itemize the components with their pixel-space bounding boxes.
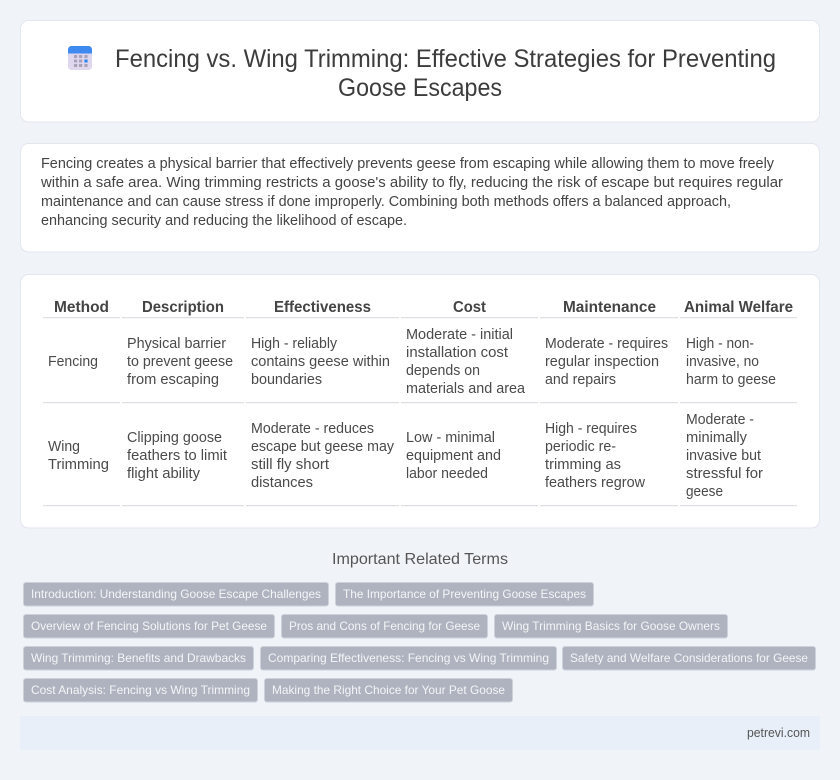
table row: fencing: Moderate - initial bbox=[406, 327, 513, 343]
table row: fencing: regular inspection bbox=[545, 354, 659, 370]
table row: wing trimming: equipment and bbox=[406, 448, 501, 464]
table header row bbox=[54, 299, 793, 316]
table row: wing trimming: Low - minimal bbox=[406, 430, 495, 446]
text block: summary: maintenance and can cause stress if done improperly. Combining both methods offers a balanced approach, bbox=[41, 194, 731, 210]
header panel bbox=[20, 20, 820, 122]
table row: fencing: materials and area bbox=[406, 381, 525, 397]
text block: summary bbox=[40, 156, 783, 229]
tag list: related terms: Safety and Welfare Considerations for Geese bbox=[570, 651, 808, 665]
tag list: related terms: Overview of Fencing Solutions for Pet Geese bbox=[31, 619, 267, 633]
tag list: related terms: Wing Trimming Basics for Goose Owners bbox=[502, 619, 720, 633]
table row: wing trimming: trimming as bbox=[545, 457, 621, 473]
table row: wing trimming bbox=[48, 412, 763, 500]
table header row: Animal Welfare bbox=[684, 299, 793, 316]
table row: fencing: Physical barrier bbox=[127, 336, 226, 352]
table row: wing trimming: Wing bbox=[48, 439, 80, 455]
tag list: related terms bbox=[24, 582, 816, 702]
table row: fencing: from escaping bbox=[127, 372, 219, 388]
table row: fencing: contains geese within bbox=[251, 354, 390, 370]
text block: summary: enhancing security and reducing the likelihood of escape. bbox=[41, 213, 407, 229]
tag list: related terms: Introduction: Understanding Goose Escape Challenges bbox=[31, 587, 321, 601]
table row: fencing: depends on bbox=[406, 363, 480, 379]
table row: wing trimming: High - requires bbox=[545, 421, 637, 437]
table row: fencing: High - non- bbox=[686, 336, 754, 352]
table row: fencing: Fencing bbox=[48, 354, 98, 370]
table row: wing trimming: Moderate - bbox=[686, 412, 754, 428]
table row: wing trimming: Clipping goose bbox=[127, 430, 222, 446]
table row: wing trimming: still fly short bbox=[251, 457, 329, 473]
footer source text: petrevi.com bbox=[747, 726, 810, 740]
table row: fencing: invasive, no bbox=[686, 354, 759, 370]
table header row: Effectiveness bbox=[274, 299, 371, 316]
table row: wing trimming: stressful for bbox=[686, 466, 763, 482]
table row: fencing bbox=[48, 327, 776, 397]
panel: comparison table bbox=[20, 274, 820, 528]
table header row: Description bbox=[142, 299, 224, 316]
table row: wing trimming: Trimming bbox=[48, 457, 109, 473]
tag list: related terms: The Importance of Preventing Goose Escapes bbox=[343, 587, 586, 601]
tag list: related terms: Cost Analysis: Fencing vs Wing Trimming bbox=[31, 683, 250, 697]
table row: fencing: High - reliably bbox=[251, 336, 338, 352]
table row: wing trimming: flight ability bbox=[127, 466, 201, 482]
table row: wing trimming: Moderate - reduces bbox=[251, 421, 374, 437]
table row: wing trimming: geese bbox=[686, 484, 723, 500]
table row: fencing: to prevent geese bbox=[127, 354, 233, 370]
icon: calendar grid bbox=[68, 46, 92, 70]
table row: wing trimming: labor needed bbox=[406, 466, 488, 482]
table row: fencing: boundaries bbox=[251, 372, 322, 388]
table row: wing trimming: periodic re- bbox=[545, 439, 616, 455]
text block: summary: within a safe area. Wing trimming restricts a goose's ability to fly, reducing the risk of escape but requires regular bbox=[40, 175, 783, 191]
tag list: related terms: Pros and Cons of Fencing for Geese bbox=[289, 619, 480, 633]
table row: fencing: installation cost bbox=[406, 345, 508, 361]
title: Fencing vs. Wing Trimming: Effective Strategies for Preventing bbox=[115, 45, 776, 73]
footer bar bbox=[20, 716, 820, 750]
tag list: related terms: Making the Right Choice for Your Pet Goose bbox=[272, 683, 505, 697]
table row: fencing: and repairs bbox=[545, 372, 616, 388]
table row: wing trimming: feathers to limit bbox=[127, 448, 227, 464]
table row: wing trimming: feathers regrow bbox=[545, 475, 646, 491]
table row: wing trimming: escape but geese may bbox=[251, 439, 395, 455]
title: Goose Escapes bbox=[338, 74, 502, 102]
table row: wing trimming: distances bbox=[251, 475, 313, 491]
tag list: related terms: Comparing Effectiveness: Fencing vs Wing Trimming bbox=[268, 651, 549, 665]
panel: summary paragraph bbox=[20, 144, 820, 252]
heading: important related terms: Important Related Terms bbox=[332, 551, 508, 568]
tag list: related terms: Wing Trimming: Benefits and Drawbacks bbox=[31, 651, 246, 665]
title bbox=[115, 45, 776, 102]
text block: summary: Fencing creates a physical barrier that effectively prevents geese from escaping while allowing them to move freely bbox=[41, 156, 775, 172]
table header row: Maintenance bbox=[563, 299, 656, 316]
table header row: Method bbox=[54, 299, 109, 316]
table row: fencing: Moderate - requires bbox=[545, 336, 668, 352]
table row: fencing: harm to geese bbox=[686, 372, 776, 388]
table header row: Cost bbox=[453, 299, 487, 316]
table row: wing trimming: invasive but bbox=[686, 448, 761, 464]
table row: wing trimming: minimally bbox=[686, 430, 748, 446]
